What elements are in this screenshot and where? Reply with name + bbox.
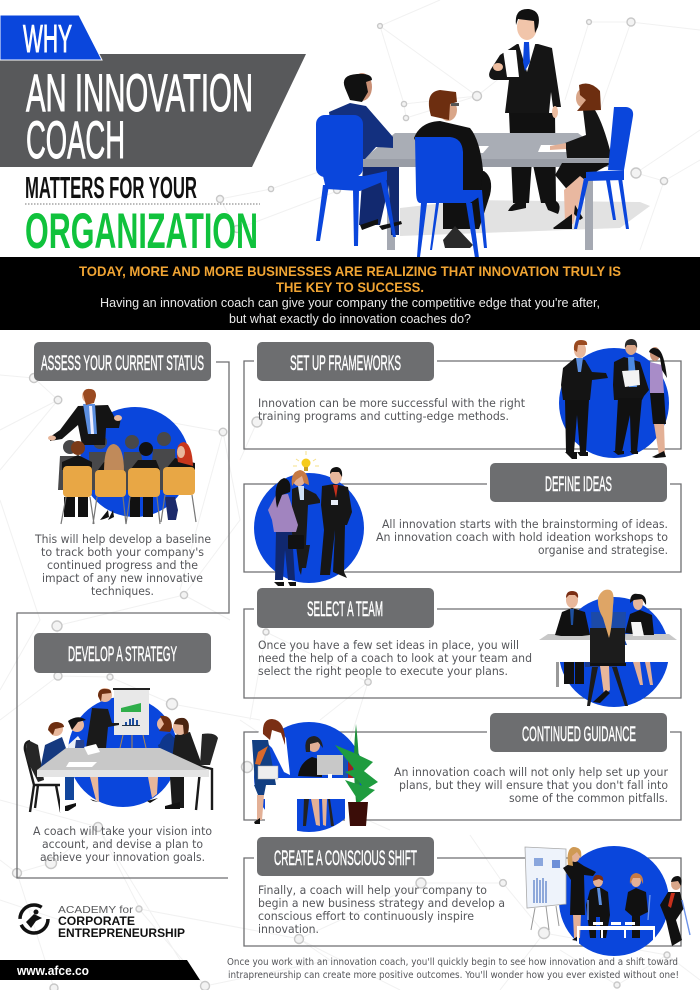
text block: impact of any new innovative xyxy=(42,571,203,585)
text block xyxy=(34,532,211,598)
heading: CREATE A CONSCIOUS SHIFT xyxy=(274,847,417,870)
text block: Finally, a coach will help your company to xyxy=(258,883,487,897)
illustration: colleagues with light bulb xyxy=(254,451,364,586)
logo: academy for corporate entrepreneurship: CORPORATE xyxy=(58,914,135,928)
illustration: interview panel xyxy=(539,590,677,707)
illustration: presenter and audience xyxy=(48,389,196,524)
title block xyxy=(0,15,306,259)
intro headline line two: THE KEY TO SUCCESS. xyxy=(276,279,424,295)
heading xyxy=(490,463,667,502)
text block: organise and strategise. xyxy=(538,543,668,557)
text block: begin a new business strategy and develop a xyxy=(258,896,505,910)
text block: All innovation starts with the brainstorming of ideas. xyxy=(382,517,668,531)
text block: A coach will take your vision into xyxy=(33,824,212,838)
text block xyxy=(376,517,668,557)
logo: academy for corporate entrepreneurship: ENTREPRENEURSHIP xyxy=(58,926,185,940)
table xyxy=(363,133,612,250)
text block: select the right people to execute your plans. xyxy=(258,664,508,678)
blue chair right xyxy=(574,107,633,229)
text block: need the help of a coach to look at your team and xyxy=(258,651,532,665)
text block: Innovation can be more successful with the right xyxy=(258,396,525,410)
text block: techniques. xyxy=(91,584,154,598)
illustration: boardroom meeting xyxy=(316,9,650,258)
text block: continued progress and the xyxy=(47,558,198,572)
panel: define ideas xyxy=(244,451,681,586)
text block: some of the common pitfalls. xyxy=(509,791,668,805)
website bar: www.afce.co xyxy=(16,964,89,978)
heading: organization: ORGANIZATION xyxy=(25,203,258,259)
text block: An innovation coach will not only help set up your xyxy=(394,765,668,779)
website bar xyxy=(0,960,200,980)
seated woman right xyxy=(550,83,612,229)
blue chair middle xyxy=(415,137,487,258)
heading: why: WHY xyxy=(23,18,72,61)
intro text line two: but what exactly do innovation coaches do? xyxy=(229,312,471,326)
heading: coach: COACH xyxy=(26,111,125,170)
intro band xyxy=(0,257,700,330)
heading: matters for your: MATTERS FOR YOUR xyxy=(25,170,197,205)
title banner: blue why tab xyxy=(0,15,102,60)
heading: SELECT A TEAM xyxy=(307,598,383,621)
text block xyxy=(258,883,505,936)
logo: academy for corporate entrepreneurship xyxy=(20,904,185,940)
panel: set up frameworks xyxy=(244,339,681,459)
heading: DEVELOP A STRATEGY xyxy=(68,643,177,666)
text block: achieve your innovation goals. xyxy=(40,850,205,864)
intro headline: TODAY, MORE AND MORE BUSINESSES ARE REALIZING THAT INNOVATION TRULY IS xyxy=(79,263,621,279)
text block xyxy=(258,638,532,678)
text block: This will help develop a baseline xyxy=(34,532,211,546)
text block xyxy=(394,765,668,805)
logo mark xyxy=(20,905,48,933)
panel: develop a strategy xyxy=(25,633,218,864)
text block xyxy=(33,824,212,864)
heading: an innovation: AN INNOVATION xyxy=(26,64,253,123)
logo: academy for corporate entrepreneurship: ACADEMY for xyxy=(58,904,134,916)
panel: assess your current status: ASSESS YOUR CURRENT STATUS xyxy=(41,352,204,375)
standing man xyxy=(489,9,561,214)
text block: An innovation coach with hold ideation workshops to xyxy=(376,530,668,544)
heading xyxy=(257,588,434,628)
panel: create a conscious shift xyxy=(244,837,690,956)
text block: training programs and cutting-edge methods. xyxy=(258,409,509,423)
heading xyxy=(257,837,434,876)
heading xyxy=(257,342,434,381)
illustration: panel discussion and flip chart xyxy=(525,846,690,956)
text block: Once you have a few set ideas in place, you will xyxy=(258,638,519,652)
heading xyxy=(34,633,211,673)
panel: continued guidance xyxy=(244,713,681,834)
closing text xyxy=(227,957,679,981)
panel: select a team xyxy=(244,588,681,707)
text block: conscious effort to continuously inspire xyxy=(258,909,474,923)
text block: account, and devise a plan to xyxy=(42,837,203,851)
seated man left xyxy=(329,73,402,235)
text block: to track both your company's xyxy=(41,545,204,559)
blue chair left xyxy=(316,115,396,246)
seated man middle xyxy=(414,90,491,248)
intro text: Having an innovation coach can give your company the competitive edge that you're after, xyxy=(100,296,600,310)
illustration: strategy meeting xyxy=(25,688,218,812)
text block xyxy=(258,396,525,423)
panel: assess your current status xyxy=(17,342,229,878)
heading xyxy=(34,342,211,381)
title banner: grey xyxy=(0,54,306,167)
heading: SET UP FRAMEWORKS xyxy=(290,352,401,375)
illustration: three colleagues xyxy=(559,339,669,459)
text block: plans, but they will ensure that you don't fall into xyxy=(399,778,668,792)
heading: DEFINE IDEAS xyxy=(545,473,612,496)
text block: innovation. xyxy=(258,922,319,936)
illustration: office desk and plant xyxy=(252,719,378,834)
heading xyxy=(490,713,667,752)
